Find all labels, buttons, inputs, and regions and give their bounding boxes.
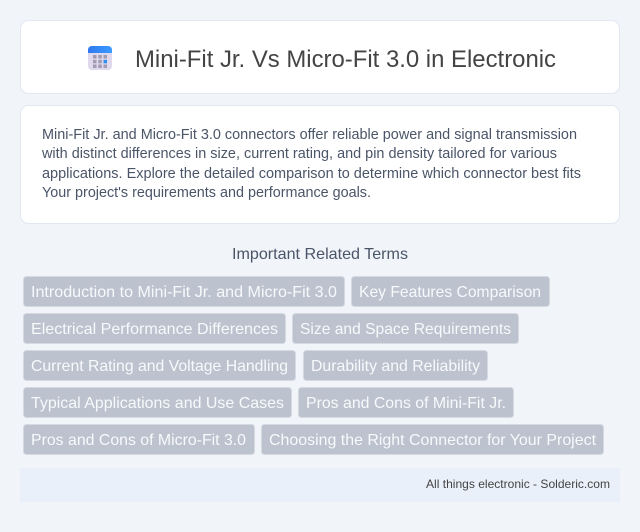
tag: introduction: Introduction to Mini-Fit Jr. and Micro-Fit 3.0 (31, 284, 337, 301)
panel: title card (20, 20, 620, 94)
tag: pros and cons mini-fit (298, 388, 514, 418)
tag: current rating (24, 350, 296, 380)
tag: choosing connector: Choosing the Right Connector for Your Project (269, 432, 597, 449)
tag: key features: Key Features Comparison (359, 284, 541, 301)
tag: durability (304, 350, 488, 380)
tag: durability: Durability and Reliability (311, 358, 480, 375)
tag: electrical performance: Electrical Performance Differences (31, 321, 278, 338)
tag: key features (352, 276, 550, 306)
tag: choosing connector (262, 424, 604, 454)
description text: with distinct differences in size, current rating, and pin density tailored for various (41, 146, 557, 162)
tag: current rating: Current Rating and Voltage Handling (31, 358, 288, 375)
description text (41, 127, 581, 201)
tag: size and space (292, 314, 518, 344)
tag: introduction (24, 276, 344, 306)
tag: typical applications: Typical Applications and Use Cases (31, 395, 284, 412)
footer (20, 468, 620, 502)
description text: applications. Explore the detailed comparison to determine which connector best fits (42, 166, 581, 182)
icon: calendar (88, 46, 112, 70)
description text: Your project's requirements and performance goals. (42, 185, 371, 201)
panel: description (20, 106, 620, 224)
tag: pros and cons micro-fit (24, 424, 254, 454)
title: Mini-Fit Jr. Vs Micro-Fit 3.0 in Electronic (135, 46, 556, 73)
tag list (24, 276, 604, 454)
tag: pros and cons micro-fit: Pros and Cons of Micro-Fit 3.0 (31, 432, 246, 449)
tag: pros and cons mini-fit: Pros and Cons of Mini-Fit Jr. (306, 395, 506, 412)
footer: All things electronic - Solderic.com (426, 477, 610, 491)
tag: electrical performance (24, 314, 286, 344)
tag: size and space: Size and Space Requirements (300, 321, 511, 338)
description text: Mini-Fit Jr. and Micro-Fit 3.0 connectors offer reliable power and signal transmission (42, 127, 577, 143)
tag: typical applications (24, 388, 292, 418)
heading: related terms: Important Related Terms (232, 246, 408, 263)
